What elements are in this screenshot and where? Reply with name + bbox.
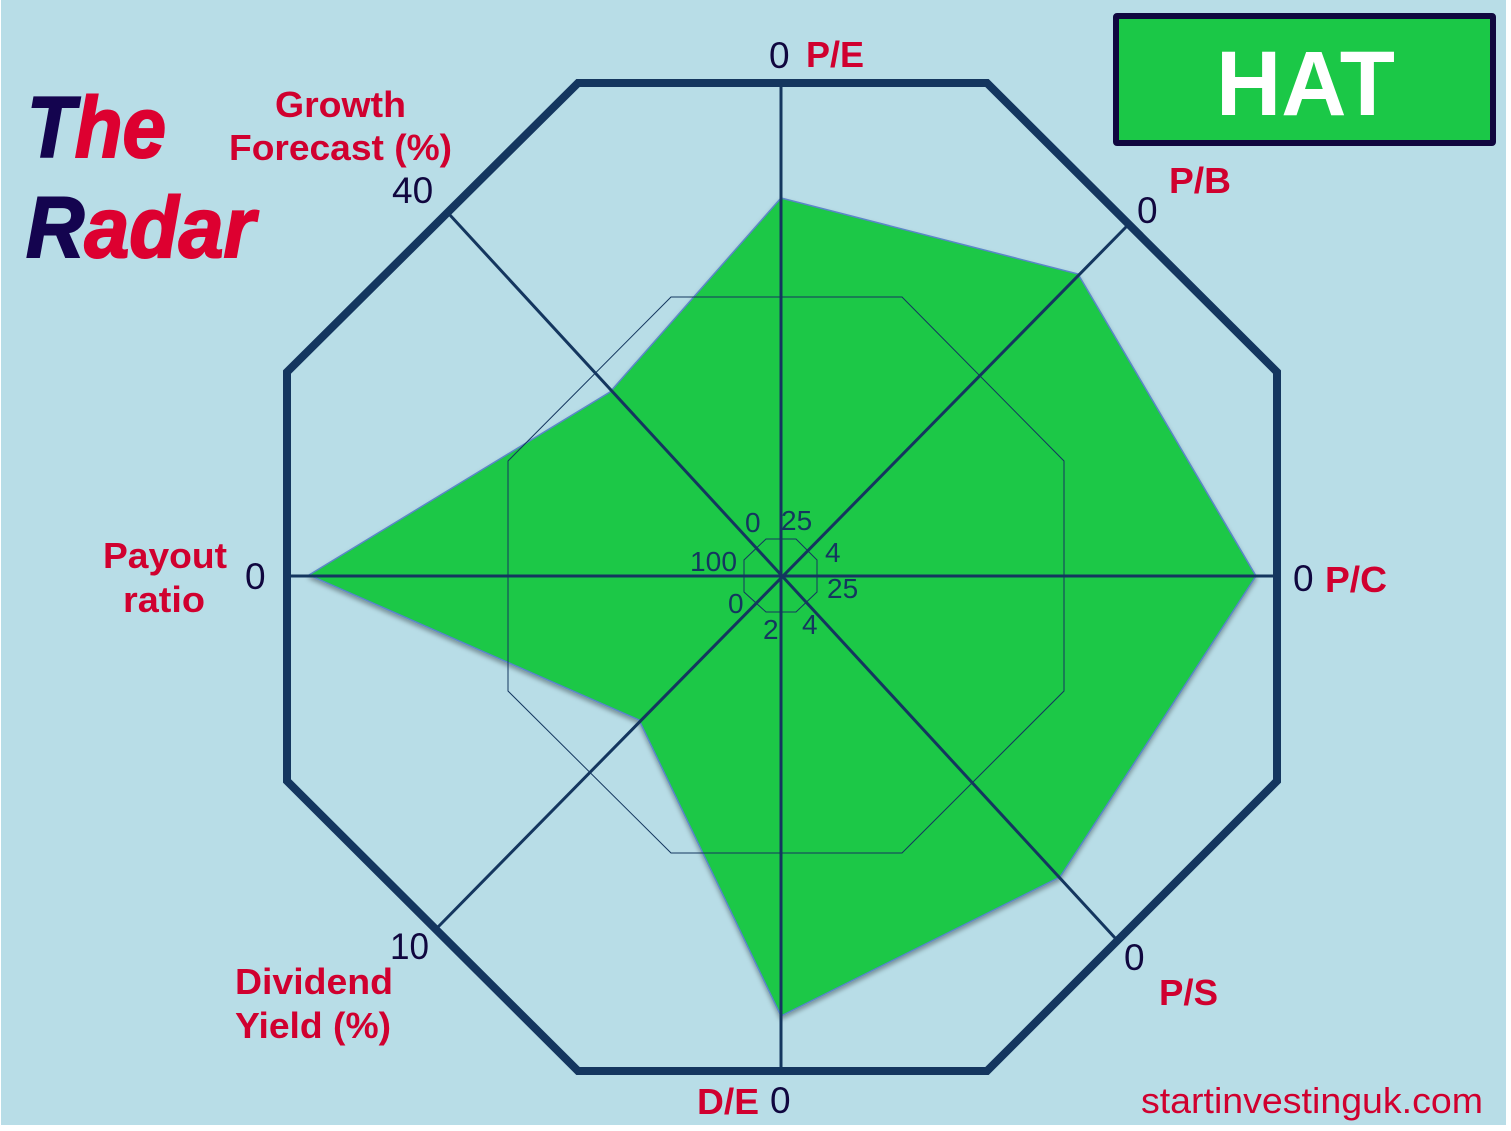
- ticker box: HAT: HAT: [1216, 33, 1395, 135]
- data polygon: HAT scores: [309, 198, 1256, 1016]
- label: Dividend Yield: [235, 961, 393, 1046]
- outer octagon: [287, 83, 1277, 1071]
- inner axis values: 100: [690, 546, 737, 577]
- inner axis values: 25: [827, 573, 858, 604]
- inner axis values: 2: [763, 614, 779, 645]
- outer axis values: 0: [1293, 558, 1314, 599]
- label: P/C: P/C: [1325, 559, 1387, 600]
- inner octagon: [744, 539, 817, 612]
- label: Growth Forecast: Forecast (%): [229, 127, 452, 168]
- outer axis values: 0: [770, 1080, 791, 1121]
- inner axis values: 4: [825, 537, 841, 568]
- inner axis values: 0: [728, 588, 744, 619]
- label: Dividend Yield: Dividend: [235, 961, 393, 1002]
- outer axis values: 0: [1124, 937, 1145, 978]
- website credit: startinvestinguk.com: [1141, 1080, 1483, 1121]
- label: Payout ratio: ratio: [123, 579, 205, 620]
- outer axis values: 0: [1137, 190, 1158, 231]
- radar spokes: [289, 85, 1273, 1070]
- label: P/E: P/E: [806, 34, 864, 75]
- title: The Radar: Radar: [26, 180, 259, 276]
- inner axis values: 0: [745, 507, 761, 538]
- ticker box: HAT: [1116, 16, 1493, 143]
- outer axis values: 0: [769, 35, 790, 76]
- label: Growth Forecast: Growth: [275, 84, 406, 125]
- title: The Radar: [26, 80, 259, 276]
- label: P/S: P/S: [1159, 972, 1218, 1013]
- label: Payout ratio: [103, 535, 227, 620]
- outer axis values: [245, 35, 1314, 1121]
- label: Growth Forecast: [229, 84, 452, 168]
- outer axis values: 10: [390, 926, 429, 967]
- label: Payout ratio: Payout: [103, 535, 227, 576]
- outer axis values: 0: [245, 556, 266, 597]
- inner axis values: 4: [802, 609, 818, 640]
- label: P/B: P/B: [1169, 160, 1231, 201]
- label: D/E: D/E: [697, 1081, 759, 1122]
- inner axis values: [690, 505, 858, 645]
- benchmark octagon: [508, 297, 1064, 853]
- outer axis values: 40: [392, 170, 433, 211]
- inner axis values: 25: [781, 505, 812, 536]
- title: The Radar: The: [27, 80, 166, 176]
- label: Dividend Yield: Yield (%): [235, 1005, 391, 1046]
